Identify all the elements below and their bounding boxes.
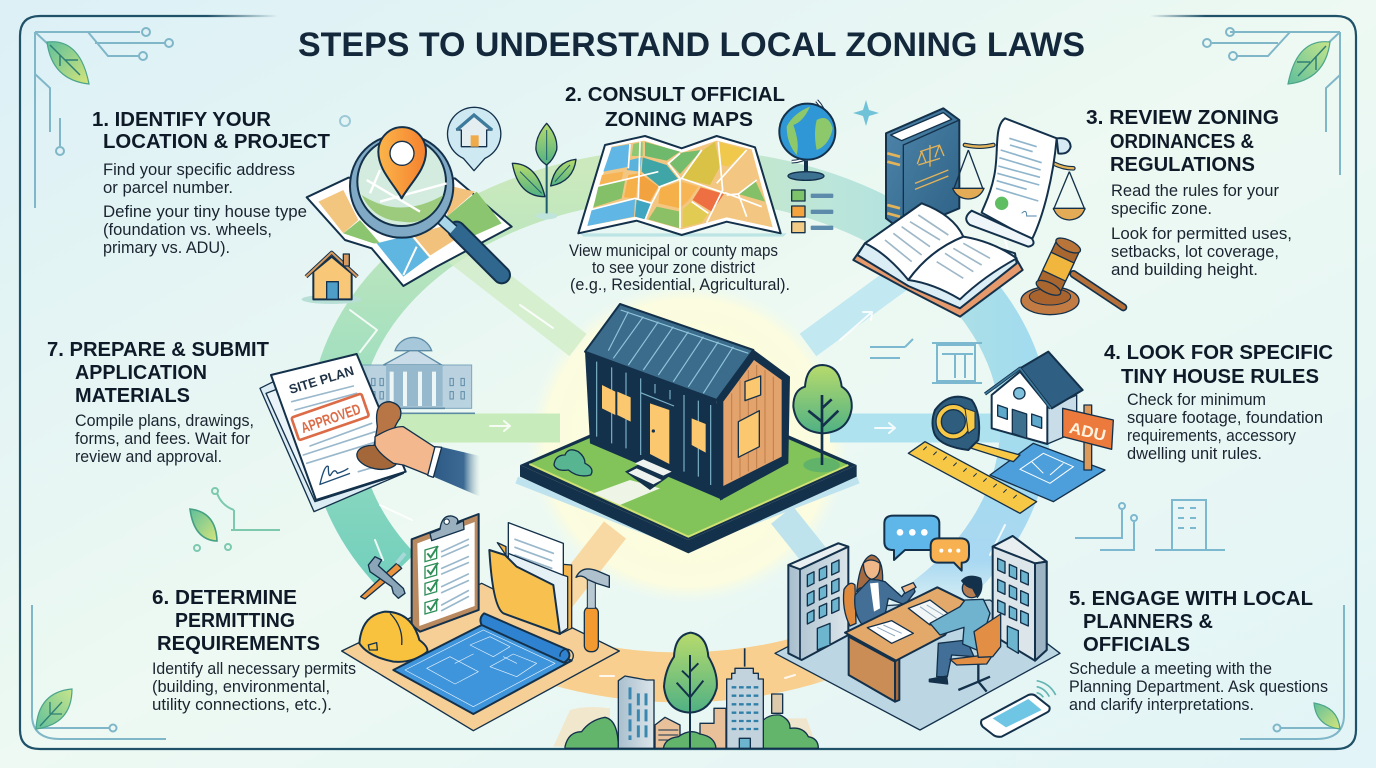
step 6 heading: PERMITTING [175,609,295,632]
step 2 body: View municipal or county maps [569,242,778,260]
step 5 body: Planning Department. Ask questions [1069,678,1328,696]
step 4 body: Check for minimum [1127,391,1266,409]
step 5 body [1069,660,1328,714]
hand with stamp [355,402,480,497]
smartphone [981,681,1056,737]
illustration: step 2 zoning map [578,101,835,237]
step 3 heading: ORDINANCES & [1110,130,1254,153]
blueprint [990,443,1105,502]
step 1 body: Define your tiny house type [103,203,307,221]
title: STEPS TO UNDERSTAND LOCAL ZONING LAWS [298,26,1085,64]
step 5 heading [1069,587,1313,656]
step 5 heading: OFFICIALS [1083,633,1190,656]
wrench and screwdriver [361,553,405,599]
step 5 heading: PLANNERS & [1083,610,1213,633]
documents: SITE PLAN [287,363,356,397]
step 1 body [103,161,307,257]
ruler [908,442,1037,513]
plant [512,123,576,219]
house [585,304,790,501]
step 6 heading: REQUIREMENTS [157,632,320,655]
circular process ring [334,174,1025,677]
decoration: left leaf circuit near step 6 [190,488,280,551]
step 2 heading: ZONING MAPS [605,108,753,131]
decoration: sparkle [853,100,879,126]
illustration: bottom city skyline [553,633,818,748]
step 3 body [1111,182,1292,279]
bushes and low buildings [553,694,818,748]
step 6 body: Identify all necessary permits [152,660,356,678]
step 7 heading: APPLICATION [75,361,207,384]
hammer [576,569,609,652]
corner decoration: bottom left [32,605,166,739]
corner decoration: top right [1203,28,1340,175]
step 6 text block [152,586,356,714]
step 2 heading: 2. CONSULT OFFICIAL [565,83,785,106]
tree [664,633,717,748]
courthouse [360,337,475,413]
step 6 heading: 6. DETERMINE [152,586,297,609]
step 5 text block [1069,587,1328,714]
right tower [727,648,763,748]
step 3 body: Read the rules for your [1111,182,1280,200]
step 2 heading [565,83,785,131]
house bubble [447,107,501,171]
step 2 body [569,242,790,294]
step 4 body: dwelling unit rules. [1127,445,1262,463]
step 1 heading: LOCATION & PROJECT [103,130,330,153]
step 1 body: or parcel number. [103,179,233,197]
open book [853,203,1023,317]
step 1 heading: 1. IDENTIFY YOUR [92,108,271,131]
step 3 heading: 3. REVIEW ZONING [1086,106,1279,129]
desk mat [342,583,619,731]
illustration: central tiny house [517,304,858,553]
step 4 heading: 4. LOOK FOR SPECIFIC [1104,341,1333,364]
map pin [378,127,426,198]
corner decoration: top left [35,28,173,208]
step 7 heading: MATERIALS [75,384,190,407]
step 1 body: (foundation vs. wheels, [103,221,272,239]
tree [793,365,852,472]
corner decoration: bottom right [1240,605,1344,739]
ground platform [517,392,858,553]
step 4 heading [1104,341,1333,388]
bush [554,450,592,476]
speech bubbles [884,516,969,571]
step 6 body: utility connections, etc.). [152,696,332,714]
gavel [1021,235,1123,315]
step 7 heading: 7. PREPARE & SUBMIT [47,338,269,361]
step 2 body: to see your zone district [592,259,755,277]
man [929,576,1001,692]
folder [489,523,572,634]
step 5 body: Schedule a meeting with the [1069,660,1272,678]
step 3 text block [1086,106,1292,279]
step 7 heading [47,338,269,407]
step 4 body [1127,391,1323,463]
step 1 text block [92,108,330,257]
tape measure [932,397,1020,462]
documents: APPROVED [299,401,363,437]
step 2 body: (e.g., Residential, Agricultural). [570,276,790,294]
step 6 body: (building, environmental, [152,678,330,696]
desk [845,587,967,702]
magnifier [350,134,502,275]
right building [993,536,1047,661]
left building [788,543,848,660]
step 3 body: setbacks, lot coverage, [1111,243,1279,261]
step 3 heading [1086,106,1279,176]
documents [260,354,406,512]
step 4 body: requirements, accessory [1127,427,1297,445]
step 3 heading: REGULATIONS [1110,153,1255,176]
step 7 text block [47,338,269,466]
step 3 body: Look for permitted uses, [1111,225,1292,243]
map [307,178,512,286]
blueprint [393,613,573,714]
step 7 body: Compile plans, drawings, [75,412,254,430]
globe [779,101,835,180]
step 1 body: Find your specific address [103,161,295,179]
ADU sign: ADU [1067,420,1107,445]
clipboard [412,514,479,632]
step 1 body: primary vs. ADU). [103,239,230,257]
illustration: step 1 map and magnifier [302,107,576,304]
step 5 body: and clarify interpretations. [1069,696,1254,714]
ADU sign [1063,405,1113,470]
step 4 heading: TINY HOUSE RULES [1121,365,1319,388]
map legend [792,190,833,233]
small house [302,253,362,304]
step 4 body: square footage, foundation [1127,409,1323,427]
folded map [578,136,787,237]
step 7 body [75,412,254,466]
step 4 text block [1104,341,1333,463]
illustration: step 7 site plan approved [260,337,480,512]
woman [843,555,916,626]
central glow [528,283,848,603]
decoration: ring dots [340,116,350,126]
step 2 text block [565,83,790,294]
step 7 body: review and approval. [75,448,222,466]
house [985,352,1083,444]
left tower [618,676,654,748]
ring arrows [350,222,1013,678]
step 3 body: specific zone. [1111,200,1212,218]
decoration: circuit and blueprint icon right of centre [870,339,1225,550]
step 3 body: and building height. [1111,261,1258,279]
step 5 heading: 5. ENGAGE WITH LOCAL [1069,587,1313,610]
step 6 heading [152,586,320,655]
step 7 body: forms, and fees. Wait for [75,430,251,448]
illustration: step 5 meeting with planners [775,516,1060,737]
illustration: step 6 permits and blueprints [342,514,619,731]
step 6 body [152,660,356,714]
balance scale [953,145,1085,220]
law book [886,108,959,232]
illustration: step 3 law books, scroll and gavel [853,108,1123,317]
illustration: step 4 tape, ruler, house and ADU sign [908,352,1113,513]
hard hat [359,612,427,662]
floor [775,600,1060,730]
step 1 heading [92,108,330,153]
scroll [966,118,1071,247]
